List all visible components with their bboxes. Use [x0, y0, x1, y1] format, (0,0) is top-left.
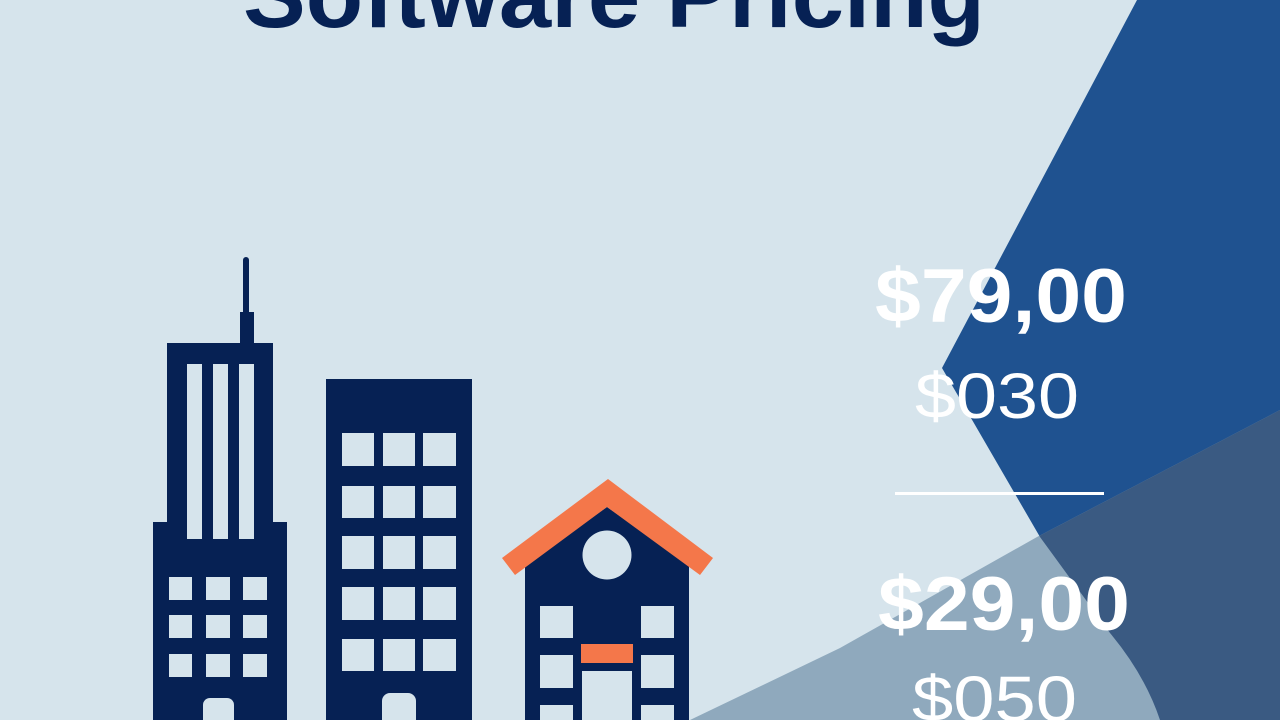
background shape: blue panel	[942, 0, 1280, 720]
house windows	[540, 606, 674, 720]
divider line	[895, 492, 1104, 495]
house door	[582, 671, 632, 720]
background shape: grey-blue panel	[690, 410, 1280, 720]
icon: skyscraper	[153, 257, 287, 720]
house door awning	[581, 644, 633, 663]
price: $29,00: $29,00	[878, 562, 1130, 647]
house round window	[582, 530, 632, 580]
price: $030: $030	[915, 360, 1079, 432]
background shape: panel overlap	[1039, 410, 1280, 720]
icon: office building	[326, 379, 472, 720]
price: $79,00: $79,00	[875, 254, 1127, 339]
icon: house	[502, 479, 713, 720]
house roof	[502, 479, 713, 575]
